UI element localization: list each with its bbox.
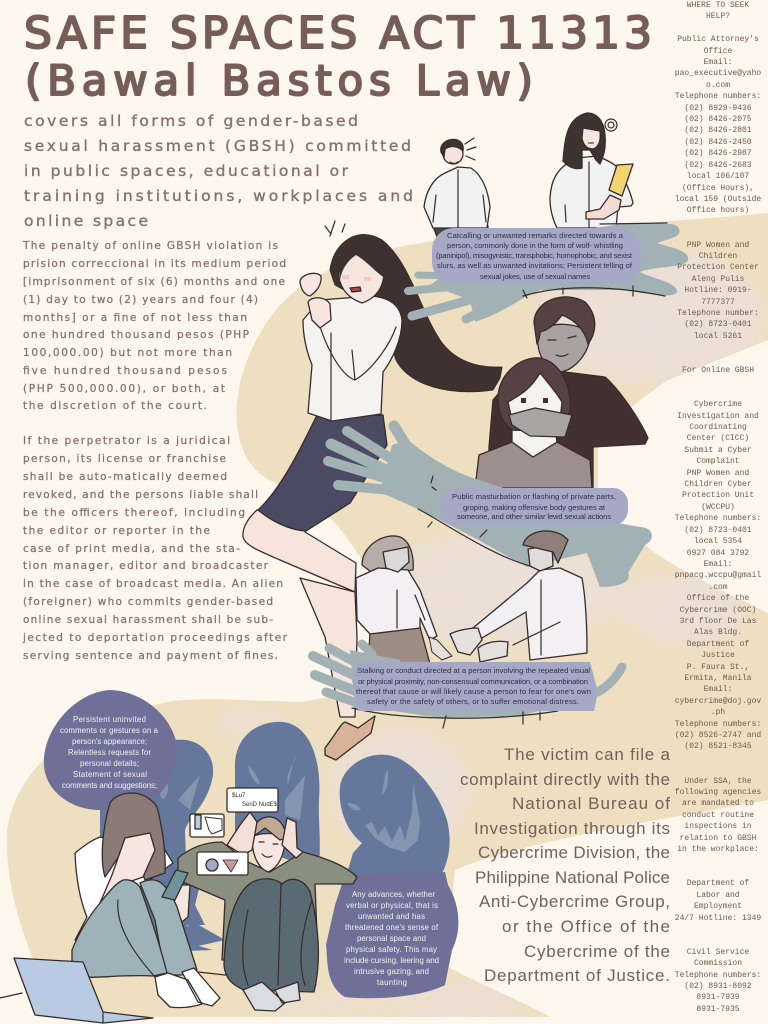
shadow ghost: right (340, 755, 450, 880)
speech bubble: any advances: personal space and (357, 934, 426, 943)
covering hand (509, 408, 572, 437)
speech bubble: text (227, 788, 278, 812)
man head (538, 324, 590, 372)
speckle texture (190, 240, 768, 1024)
victim filing text: The victim can file a (504, 745, 671, 764)
victim filing text (460, 745, 671, 985)
shadow ghost: left (100, 735, 213, 952)
girl hair (102, 793, 165, 880)
title (24, 8, 652, 105)
victim filing text: Anti-Cybercrime Group, (479, 892, 670, 911)
speech bubble: persistent comments: comments and suggestions; (62, 781, 157, 790)
text block: penalty (22, 240, 286, 412)
woman shirt two (356, 568, 437, 640)
figure: man with head in hands: $Lu7 (232, 793, 246, 799)
text block: juridical person: person, its license or franchise (23, 453, 226, 465)
speech bubble: any advances: intrusive gazing, and (354, 967, 429, 976)
girl shirt (75, 837, 173, 940)
hand with panel: catcalling: slurs, as well as unwanted invitations; Persistent telling of (437, 261, 633, 270)
speech bubble: emoji (197, 852, 248, 875)
speech bubble: persistent comments: Persistent uninvited (73, 715, 146, 724)
text block: penalty: [imprisonment of six (6) months and one (23, 276, 285, 288)
man pants (224, 879, 318, 992)
hand with panel: catcalling: sexual jokes, use of sexual names (480, 272, 590, 281)
victim top (475, 442, 592, 488)
woman skirt two (368, 627, 430, 664)
figure: man with head in hands (0, 788, 357, 1011)
speech bubble: persistent comments: person's appearance; (72, 737, 147, 746)
text block: juridical person: be the officers thereof, including (23, 507, 245, 519)
text block: penalty: (1) day to two (2) years and four (4) (23, 294, 258, 306)
background beige shape (7, 213, 768, 1017)
victim filing text: Cybercrime of the (524, 942, 670, 961)
speech bubble: persistent comments: comments or gestures on a (60, 726, 159, 735)
man shirt two (473, 568, 587, 660)
text block: penalty: one hundred thousand pesos (PHP (23, 329, 249, 341)
stalking text panel (352, 662, 598, 711)
speech bubble: persistent comments: personal details; (80, 759, 139, 768)
speech bubble: any advances: threatened one's sense of (345, 923, 439, 932)
public acts text panel (440, 488, 628, 525)
hand with panel: public acts: groping, making offensive body gestures at (463, 503, 606, 512)
speech bubble: any advances: Any advances, whether (352, 890, 435, 899)
victim filing text: National Bureau of (512, 794, 670, 813)
text block: penalty: (PHP 500,000.00), or both, at (23, 383, 225, 395)
victim filing text: Philippine National Police (475, 868, 670, 887)
hand with panel: catcalling: Catcalling or unwanted remarks directed towards a (447, 231, 624, 240)
text block: where to seek help: WHERE TO SEEK HELP? Public Attorney's Office Email: pao_executive@yaho o.com Telephone numbers: (02) 8929-9436 (02) 8426-2075 (02) 8426-2801 (02) 8426-2450 (02) 8426-2987 (02) 8426-2683 local 106/107 (Office Hours), local 159 (Outside Office hours) PNP Women and Children Protection Center Aleng Pulis Hotline: 0919- 7777377 Telephone number: (02) 8723-0401 local 5261 For Online GBSH Cybercrime Investigation and Coordinating Center (CICC) Submit a Cyber Complaint PNP Women and Children Cyber Protection Unit (WCCPU) Telephone numbers: (02) 8723-0401 local 5354 0927 084 3792 Email: pnpacg.wccpu@gmail .com Office of the Cybercrime (OOC) 3rd floor De Las Alas Bldg. Department of Justice P. Faura St., Ermita, Manila Email: cybercrime@doj.gov .ph Telephone numbers: (02) 8526-2747 and (02) 8521-8345 Under SSA, the following agencies are mandated to conduct routine inspections in relation to GBSH in the workplace: Department of Labor and Employment 24/7 Hotline: 1349 Civil Service Commission Telephone numbers: (02) 8931-8092 8931-7939 8931-7935 (675, 1, 761, 1014)
figure: woman pushing man away (356, 531, 587, 664)
text block: juridical person: serving sentence and payment of fines. (23, 650, 278, 662)
hand with panel: public acts: Public masturbation or flashing of private parts, (452, 492, 616, 501)
subheading: training institutions, workplaces and (24, 187, 413, 205)
laptop (14, 958, 153, 1023)
figure: girl crying with phone (14, 793, 220, 1023)
speech bubble: thumbs down (190, 814, 224, 837)
grey hand (430, 224, 688, 322)
woman hair (330, 235, 502, 392)
man sweater (178, 842, 357, 960)
woman bent leg (243, 505, 356, 592)
man sweater (489, 372, 648, 490)
speech bubble: persistent comments: Relentless requests for (68, 748, 151, 757)
girl phone (162, 870, 188, 900)
victim filing text: complaint directly with the (460, 770, 670, 789)
hand with panel: stalking (313, 644, 622, 728)
text block: penalty: months] or a fine of not less than (23, 312, 247, 324)
subheading: covers all forms of gender-based (24, 112, 358, 130)
shadow ghost: middle (180, 722, 320, 950)
speech bubble: any advances: include cursing, leering and (344, 956, 439, 965)
speech bubble: any advances: unwanted and has (358, 912, 425, 921)
text block: juridical person: the editor or reporter in the (23, 525, 210, 537)
title: (Bawal Bastos Law) (25, 56, 533, 105)
victim hair and face (498, 358, 570, 432)
speech bubble: persistent comments (44, 690, 177, 810)
figure: man with head in hands: SenD NudE$ (242, 802, 278, 808)
catcalling text panel (432, 228, 641, 284)
speech bubble: any advances: verbal or physical, that is (346, 901, 438, 910)
text block: juridical person: shall be auto-matically deemed (23, 471, 227, 483)
grey hand two (380, 440, 652, 587)
text block: juridical person: in the case of broadcast media. An alien (23, 578, 283, 590)
speech bubble: any advances: physical safety. This may (346, 945, 437, 954)
text block: penalty: 100,000.00) but not more than (23, 347, 232, 359)
text block: penalty: five hundred thousand pesos (23, 365, 227, 377)
figure: annoyed woman with folder (550, 113, 633, 228)
hand with panel: catcalling: person, commonly done in the form of wolf- whistling (447, 241, 623, 250)
subheading: in public spaces, educational or (24, 162, 349, 180)
subheading: sexual harassment (GBSH) committed (24, 137, 411, 155)
subheading: online space (24, 212, 148, 230)
text block: juridical person (22, 435, 288, 662)
woman shirt (303, 296, 402, 421)
victim filing text: Cybercrime Division, the (478, 843, 670, 862)
text block: juridical person: online sexual harassment shall be sub- (23, 614, 273, 626)
woman skirt (258, 415, 387, 531)
speech bubble: any advances (326, 872, 458, 998)
text block: juridical person: tion manager, editor and broadcaster (23, 560, 269, 572)
text block: juridical person: revoked, and the persons liable shall (23, 489, 258, 501)
figure: main woman (243, 221, 502, 760)
hand with panel: stalking: safety or the safety of others, or to suffer emotional distress. (367, 697, 579, 706)
woman hair two (362, 536, 413, 575)
title: SAFE SPACES ACT 11313 (24, 8, 652, 59)
text block: penalty: the discretion of the court. (23, 400, 207, 412)
text block: penalty: The penalty of online GBSH violation is (22, 240, 278, 252)
man face and hair (252, 834, 285, 872)
grey hand three (350, 650, 400, 708)
hand with panel: public acts (328, 426, 652, 587)
man socks (243, 982, 300, 1011)
subheading (24, 112, 413, 230)
text block: juridical person: case of print media, and the sta- (23, 543, 240, 555)
victim filing text: or the Office of the (502, 917, 670, 936)
hand with panel: catcalling (408, 223, 688, 322)
text block: penalty: prision correccional in its medium period (23, 258, 286, 270)
hand with panel: public acts: someone, and other similar lewd sexual actions (457, 512, 611, 521)
woman face (338, 250, 385, 303)
text block: juridical person: If the perpetrator is a juridical (23, 435, 230, 447)
figure: laughing man (424, 138, 490, 245)
woman fists (300, 273, 321, 296)
speech bubble: persistent comments: Statement of sexual (73, 770, 147, 779)
girl socks (155, 968, 220, 1008)
hand with panel: stalking: thereof that cause or will likely cause a person to fear for one's own (356, 687, 591, 696)
figure: man covering woman's mouth (475, 297, 648, 490)
hand with panel: catcalling: (paninipol), misogynistic, transphobic, homophobic, and sexist (436, 251, 633, 260)
girl arm and hands (100, 833, 155, 903)
victim filing text: Investigation through its (474, 819, 670, 838)
speech bubble: any advances: taunting (377, 978, 407, 987)
floor line (0, 972, 316, 998)
hand with panel: stalking: Stalking or conduct directed at a person involving the repeated visual (357, 666, 590, 675)
hand with panel: stalking: or physical proximity, non-consensual communication, or a combination (358, 677, 588, 686)
text block: juridical person: jected to deportation proceedings after (22, 632, 288, 644)
victim filing text: Department of Justice. (484, 966, 670, 985)
text block: juridical person: (foreigner) who commits gender-based (23, 596, 273, 608)
girl pants (140, 880, 197, 975)
woman back leg (300, 578, 357, 717)
woman shoe (325, 716, 375, 760)
